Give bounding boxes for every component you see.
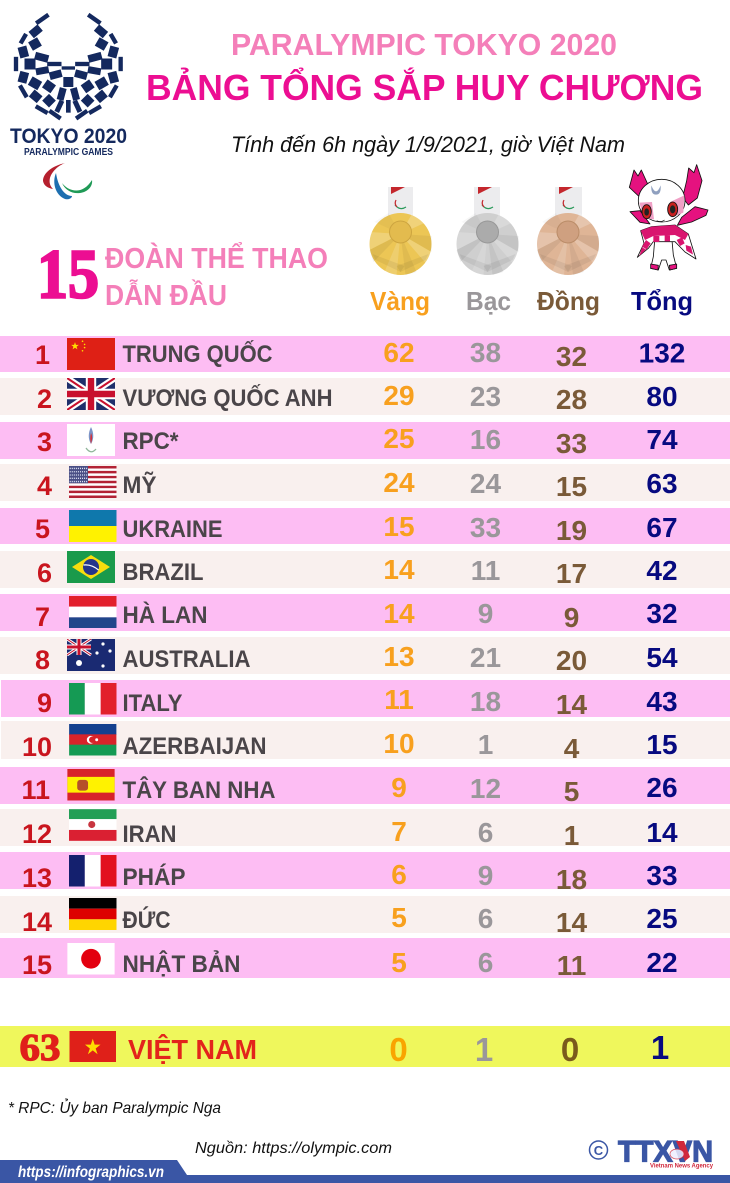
row 11: Tây Ban Nha: [0, 767, 730, 807]
row 8: Australia: 8: [35, 645, 50, 675]
logo: Tokyo 2020 Paralympic emblem: [10, 14, 127, 199]
source: Nguồn: https://olympic.com: [195, 1140, 392, 1157]
row: Việt Nam highlight: 0: [561, 1031, 579, 1068]
flag: Netherlands: [69, 596, 116, 628]
flag: China: [67, 338, 115, 370]
row 14: Đức: [0, 896, 730, 938]
footnote: RPC: * RPC: Ủy ban Paralympic Nga: [8, 1098, 221, 1117]
row 5: Ukraine: 67: [646, 512, 678, 543]
agency tagline: Vietnam News Agency: [650, 1164, 714, 1170]
row 13: Pháp: [0, 852, 730, 895]
row 7: Hà Lan: 14: [383, 598, 415, 629]
row 13: Pháp: 9: [478, 860, 493, 891]
icon: silver medal: [456, 187, 518, 275]
row 3: RPC: 16: [470, 424, 501, 455]
row 10: Azerbaijan: 10: [22, 732, 52, 762]
row 11: Tây Ban Nha: 12: [470, 773, 501, 804]
row 2: Vương quốc Anh: VƯƠNG QUỐC ANH: [122, 384, 332, 412]
icon: bronze medal: [537, 187, 599, 275]
row 9: Italy: 9: [37, 688, 52, 718]
row 6: Brazil: 14: [383, 554, 415, 585]
row 1: Trung Quốc: 132: [639, 338, 685, 368]
row 1: Trung Quốc: 32: [556, 341, 587, 372]
row 15: Nhật Bản: NHẬT BẢN: [122, 949, 240, 978]
flag: Azerbaijan: [69, 724, 116, 756]
row 7: Hà Lan: HÀ LAN: [122, 601, 208, 629]
row 13: Pháp: 33: [646, 860, 678, 891]
row 15: Nhật Bản: 11: [557, 950, 586, 981]
flag: RPC: [67, 424, 115, 456]
row 10: Azerbaijan: 10: [383, 728, 415, 759]
row 15: Nhật Bản: 22: [646, 947, 678, 978]
flag: France: [69, 855, 116, 886]
icon: gold medal: [370, 187, 432, 275]
row 9: Italy: ITALY: [122, 690, 182, 717]
row 8: Australia: 20: [556, 645, 587, 676]
row 9: Italy: 11: [384, 684, 414, 715]
row 12: Iran: 6: [478, 817, 493, 848]
row 12: Iran: 14: [646, 817, 678, 848]
row: Việt Nam highlight: 63: [20, 1027, 61, 1069]
logo text: Tokyo 2020: TOKYO 2020: [10, 125, 127, 148]
icon: Someity mascot: [629, 165, 708, 270]
row 13: Pháp: 18: [556, 864, 587, 895]
row 15: Nhật Bản: [0, 938, 730, 981]
row 4: Mỹ: 24: [470, 468, 501, 499]
row 5: Ukraine: 15: [383, 511, 415, 542]
copyright symbol: C: [594, 1143, 604, 1158]
footer link: https://infographics.vn: [18, 1164, 164, 1181]
agency emblem accent: [670, 1141, 690, 1161]
row 10: Azerbaijan: 15: [646, 729, 678, 760]
flag: Spain: [67, 769, 115, 800]
row 5: Ukraine: UKRAINE: [122, 516, 222, 543]
row 13: Pháp: PHÁP: [122, 863, 186, 891]
flag: Ukraine: [69, 510, 116, 542]
row 1: Trung Quốc: TRUNG QUỐC: [122, 340, 272, 368]
row 4: Mỹ: 15: [556, 471, 587, 502]
column header: Tổng: Tổng: [631, 286, 693, 316]
row 2: Vương quốc Anh: 28: [556, 384, 587, 415]
row 4: Mỹ: 4: [37, 471, 52, 501]
row 12: Iran: 1: [564, 820, 579, 851]
row 9: Italy: 43: [646, 686, 678, 717]
row 11: Tây Ban Nha: TÂY BAN NHA: [122, 776, 276, 804]
column header: Bạc: Bạc: [466, 286, 511, 316]
row 3: RPC: 3: [37, 427, 52, 457]
row 6: Brazil: 17: [556, 558, 587, 589]
row 12: Iran: [0, 809, 730, 851]
row 13: Pháp: 6: [391, 859, 407, 890]
flag: USA: [69, 466, 116, 498]
row 2: Vương quốc Anh: 29: [383, 380, 415, 411]
row 4: Mỹ: 24: [383, 467, 415, 498]
flag: Brazil: [67, 551, 115, 583]
row 15: Nhật Bản: 15: [22, 950, 52, 980]
row 9: Italy: 18: [470, 686, 501, 717]
row 1: Trung Quốc: 38: [470, 337, 501, 368]
row 7: Hà Lan: 9: [478, 598, 493, 629]
row 5: Ukraine: 5: [35, 514, 50, 544]
row 10: Azerbaijan: AZERBAIJAN: [122, 733, 266, 760]
row 2: Vương quốc Anh: [0, 378, 730, 415]
row: Việt Nam highlight: [0, 1026, 730, 1069]
flag: UK: [67, 378, 115, 410]
row 3: RPC: 33: [556, 428, 587, 459]
flag: Vietnam: [70, 1031, 116, 1062]
row 11: Tây Ban Nha: 5: [564, 776, 579, 807]
row 15: Nhật Bản: 6: [478, 947, 493, 978]
row 9: Italy: 14: [556, 689, 587, 720]
row 4: Mỹ: MỸ: [122, 471, 156, 499]
row 5: Ukraine: [0, 508, 730, 546]
row 8: Australia: 21: [470, 642, 501, 673]
row 8: Australia: 13: [383, 641, 415, 672]
flag: Australia: [67, 639, 115, 671]
flag: Italy: [69, 683, 116, 714]
column header: Đồng: Đồng: [537, 286, 600, 316]
row 5: Ukraine: 19: [556, 515, 587, 546]
row 2: Vương quốc Anh: 2: [37, 384, 52, 414]
row 7: Hà Lan: [0, 594, 730, 633]
row 15: Nhật Bản: 5: [391, 947, 407, 978]
heading: 15 delegations: [37, 236, 328, 314]
row 2: Vương quốc Anh: 23: [470, 381, 501, 412]
row: Việt Nam highlight: VIỆT NAM: [128, 1034, 257, 1065]
row 7: Hà Lan: 9: [564, 602, 579, 633]
row 14: Đức: 25: [646, 903, 678, 934]
row 12: Iran: 12: [22, 819, 52, 849]
row 14: Đức: 14: [556, 907, 587, 938]
agency name: TTXVN: [618, 1136, 713, 1168]
row 3: RPC: [0, 422, 730, 459]
row 11: Tây Ban Nha: 9: [391, 772, 407, 803]
row 7: Hà Lan: 32: [646, 598, 678, 629]
row 7: Hà Lan: 7: [35, 602, 50, 632]
row 4: Mỹ: [0, 464, 730, 502]
row 8: Australia: 54: [646, 642, 678, 673]
row 10: Azerbaijan: [1, 721, 730, 764]
row 5: Ukraine: 33: [470, 512, 501, 543]
title: Bảng tổng sắp huy chương: BẢNG TỔNG SẮP HUY CHƯƠNG: [146, 65, 703, 108]
row: Việt Nam highlight: 1: [475, 1031, 493, 1068]
column header: Vàng: Vàng: [370, 286, 430, 316]
row 1: Trung Quốc: 62: [383, 337, 415, 368]
row 10: Azerbaijan: 1: [478, 729, 493, 760]
row 3: RPC: RPC*: [122, 428, 179, 455]
title: Paralympic Tokyo 2020: PARALYMPIC TOKYO 2020: [231, 27, 617, 62]
flag: Iran: [69, 809, 116, 841]
row 12: Iran: 7: [391, 816, 407, 847]
footer bar: [0, 1160, 730, 1183]
icon: checkered wreath: [14, 14, 122, 120]
row 9: Italy: [1, 680, 730, 720]
row: Việt Nam highlight: 1: [651, 1029, 669, 1066]
row 1: Trung Quốc: [0, 336, 730, 372]
heading line 1: ĐOÀN THỂ THAO: [105, 241, 328, 275]
logo text: Paralympic Games: PARALYMPIC GAMES: [24, 146, 113, 158]
row 3: RPC: 74: [646, 424, 678, 455]
row 3: RPC: 25: [383, 423, 415, 454]
row 6: Brazil: BRAZIL: [122, 559, 204, 586]
subtitle: date: Tính đến 6h ngày 1/9/2021, giờ Việt Nam: [231, 132, 625, 157]
icon: agitos: [43, 163, 92, 199]
row 11: Tây Ban Nha: 11: [21, 775, 50, 805]
row: Việt Nam highlight: 0: [389, 1031, 408, 1068]
row 6: Brazil: 11: [471, 555, 500, 586]
row 11: Tây Ban Nha: 26: [646, 772, 678, 803]
row 12: Iran: IRAN: [122, 821, 176, 848]
flag: Germany: [69, 898, 116, 930]
row 8: Australia: AUSTRALIA: [122, 646, 250, 673]
row 1: Trung Quốc: 1: [35, 340, 50, 370]
row 6: Brazil: 42: [646, 555, 678, 586]
row 13: Pháp: 13: [22, 863, 52, 893]
row 2: Vương quốc Anh: 80: [646, 381, 678, 412]
row 8: Australia: [0, 637, 730, 676]
flag: Japan: [67, 943, 115, 974]
row 4: Mỹ: 63: [646, 468, 678, 499]
row 6: Brazil: [0, 551, 730, 589]
heading line 2: DẪN ĐẦU: [105, 278, 227, 312]
row 6: Brazil: 6: [37, 558, 52, 588]
row 10: Azerbaijan: 4: [564, 733, 580, 764]
row 14: Đức: 14: [22, 907, 52, 937]
row 14: Đức: 6: [478, 903, 493, 934]
row 14: Đức: 5: [391, 902, 407, 933]
logo: TTXVN: [590, 1136, 714, 1170]
row 14: Đức: ĐỨC: [122, 906, 170, 934]
big number 15: 15: [37, 236, 99, 314]
